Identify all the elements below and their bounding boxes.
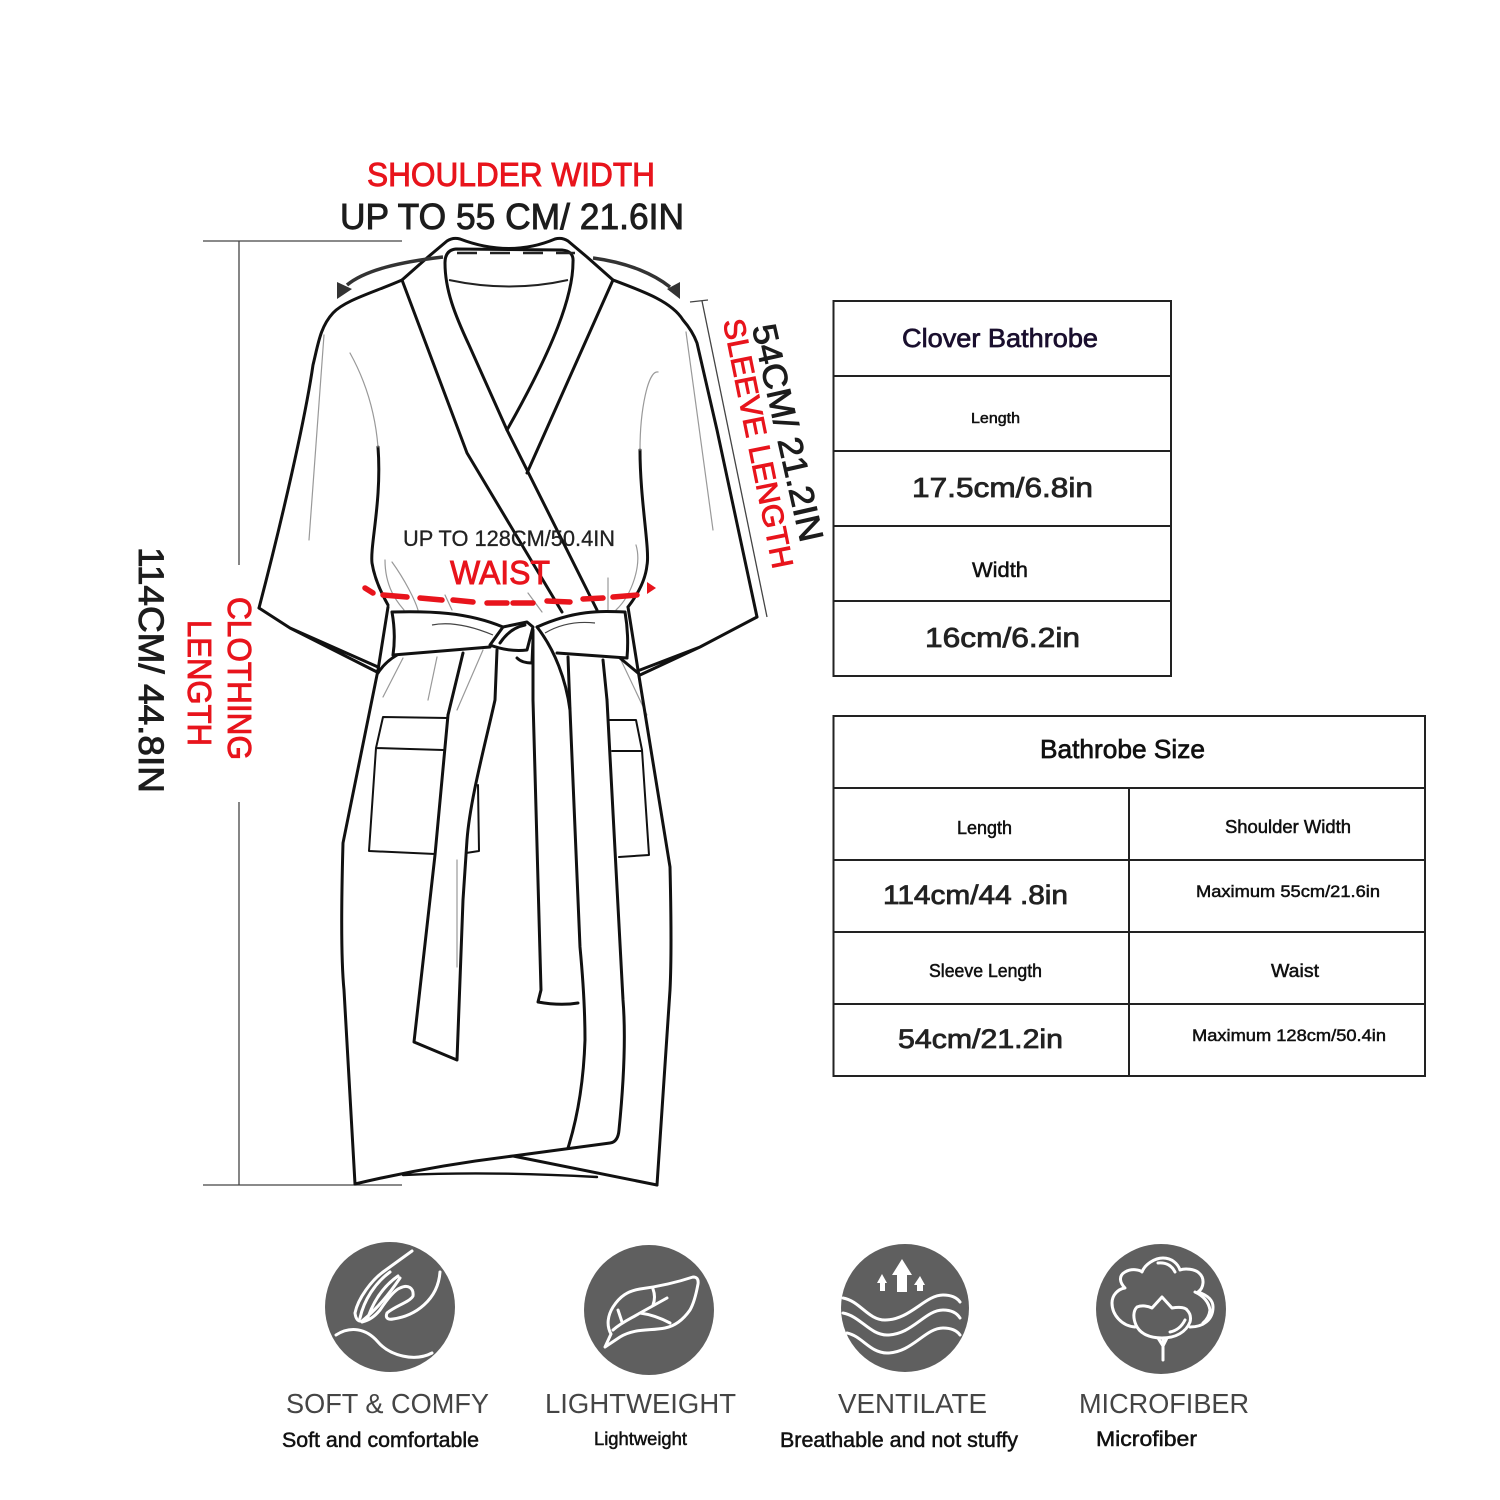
shoulder width heading: UP TO 55 CM/ 21.6IN: [340, 196, 684, 237]
feature: ventilate: [780, 1244, 1018, 1452]
table: clover bathrobe: Width: [972, 559, 1028, 582]
feature: ventilate: VENTILATE: [838, 1388, 987, 1419]
feature: soft and comfy: SOFT & COMFY: [286, 1388, 489, 1419]
icon: hand and feather: [325, 1242, 455, 1372]
icon: waves and arrows: [841, 1244, 969, 1372]
table: clover bathrobe: Clover Bathrobe: [902, 323, 1098, 353]
robe line drawing: [259, 238, 757, 1185]
hanging belt tails: [414, 627, 585, 1148]
feature: lightweight: LIGHTWEIGHT: [545, 1388, 736, 1419]
table: bathrobe size: Bathrobe Size: [1040, 734, 1205, 764]
feature: ventilate: Breathable and not stuffy: [780, 1429, 1018, 1452]
table: clover bathrobe: 17.5cm/6.8in: [912, 472, 1093, 503]
sleeve length label: [716, 316, 830, 571]
table: clover bathrobe: [834, 301, 1171, 676]
feature: soft and comfy: [282, 1242, 489, 1452]
clothing length label: LENGTH: [181, 620, 218, 746]
table: bathrobe size: Maximum 55cm/21.6in: [1196, 882, 1380, 901]
pockets: [369, 717, 649, 857]
clothing length label: [131, 547, 258, 793]
belt and knot: [378, 607, 638, 715]
shoulder width arrows: [337, 253, 680, 299]
table: bathrobe size: Shoulder Width: [1225, 817, 1351, 837]
table: bathrobe size: 114cm/44 .8in: [883, 880, 1068, 910]
collar and shoulders: [259, 238, 757, 675]
feature: microfiber: MICROFIBER: [1079, 1388, 1249, 1419]
feature: lightweight: Lightweight: [594, 1429, 687, 1449]
table: bathrobe size: [834, 716, 1425, 1076]
clothing length label: 114CM/ 44.8IN: [131, 547, 170, 793]
robe body and hem: [342, 670, 671, 1185]
waist measurement: [365, 526, 656, 603]
belt fold lines: [432, 622, 595, 635]
waist measurement: WAIST: [450, 554, 550, 591]
feature: soft and comfy: Soft and comfortable: [282, 1429, 479, 1452]
sleeve length dimension line: [690, 300, 767, 617]
shoulder width heading: SHOULDER WIDTH: [367, 156, 655, 193]
clothing length dimension line: [203, 241, 402, 1185]
sleeve length label: SLEEVE LENGTH: [716, 316, 799, 571]
table: bathrobe size: 54cm/21.2in: [898, 1024, 1063, 1054]
sleeve length label: 54CM/ 21.2IN: [744, 320, 830, 545]
feature: lightweight: [545, 1245, 736, 1449]
icon: cotton boll: [1096, 1244, 1226, 1374]
table: bathrobe size: Sleeve Length: [929, 961, 1042, 981]
table: bathrobe size: Maximum 128cm/50.4in: [1192, 1026, 1386, 1045]
shoulder width heading: [340, 156, 684, 237]
table: clover bathrobe: Length: [971, 410, 1020, 427]
icon: leaf: [584, 1245, 714, 1375]
table: bathrobe size: Waist: [1271, 961, 1319, 981]
waist measurement: UP TO 128CM/50.4IN: [403, 526, 615, 551]
clothing length label: CLOTHING: [221, 597, 258, 760]
table: clover bathrobe: 16cm/6.2in: [925, 622, 1080, 653]
feature: microfiber: [1079, 1244, 1249, 1451]
fold lines: [309, 332, 713, 967]
table: bathrobe size: Length: [957, 818, 1012, 838]
feature: microfiber: Microfiber: [1096, 1428, 1197, 1451]
